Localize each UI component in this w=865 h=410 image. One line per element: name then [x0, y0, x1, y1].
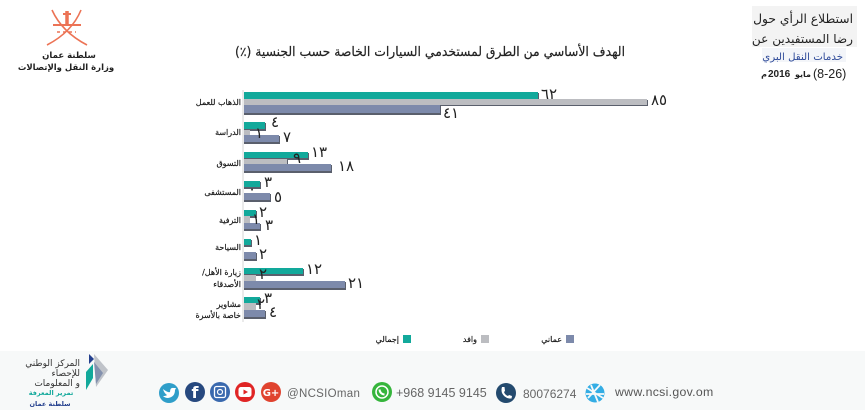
NCSI logo: و المعلومات: [34, 379, 80, 389]
icon: NCSI arrow mark: [86, 354, 108, 390]
group: shopping: ١٨: [338, 157, 354, 175]
group: study: ٤: [271, 113, 279, 131]
group: shopping: التسوق: [216, 159, 241, 168]
legend: [376, 335, 574, 345]
survey title block: خدمات النقل البري: [762, 52, 843, 63]
group: private family errands: ٢: [257, 295, 265, 313]
icon: phone: [496, 383, 516, 403]
group: recreation: ٣: [265, 216, 273, 234]
whatsapp number: +968 9145 9145: [396, 386, 487, 400]
group: study: ١: [255, 124, 263, 142]
survey title block: استطلاع الرأي حول: [753, 11, 853, 27]
icon: facebook: f: [192, 383, 200, 402]
legend: total: إجمالي: [376, 335, 399, 345]
group: shopping: ١٣: [311, 143, 327, 161]
group: visiting family and friends: زيارة الأهل/: [202, 267, 241, 277]
icon: twitter: [159, 383, 179, 403]
survey title block: (8-26): [813, 67, 846, 81]
group: hospital: ٣: [264, 173, 272, 191]
survey title block: مايو: [794, 70, 811, 79]
NCSI logo: المركز الوطني: [25, 359, 80, 369]
group: recreation: ٢: [259, 203, 267, 221]
group: hospital: [204, 173, 282, 206]
group: private family errands: مشاوير: [216, 300, 241, 309]
legend: Omani: [541, 335, 574, 344]
group: private family errands: [195, 289, 277, 321]
group: private family errands: خاصة بالأسرة: [195, 310, 241, 320]
NCSI logo: [25, 354, 108, 408]
legend: expatriate: [463, 335, 489, 344]
group: hospital: ٥: [274, 188, 282, 206]
chart title: الهدف الأساسي من الطرق لمستخدمي السيارات الخاصة حسب الجنسية (٪): [235, 43, 625, 60]
group: shopping: [216, 143, 354, 175]
footer band: [0, 351, 865, 410]
icon: youtube: [235, 382, 255, 402]
survey title block: رضا المستفيدين عن: [752, 32, 853, 47]
survey title block: م: [761, 70, 767, 79]
legend: Omani: عماني: [541, 335, 562, 344]
NCSI logo: للإحصاء: [52, 369, 80, 379]
group: tourism: السياحة: [215, 243, 241, 252]
group: recreation: ١: [252, 210, 260, 228]
icon: Oman emblem: [47, 10, 87, 45]
group: shopping: ٩: [293, 149, 301, 167]
icon: globe: [586, 384, 604, 402]
group: visiting family and friends: ٢: [259, 265, 267, 283]
group: study: الدراسة: [215, 128, 241, 137]
logo: Oman ministry of transport: [18, 10, 114, 73]
group: visiting family and friends: [202, 260, 364, 292]
group: tourism: ٢: [259, 245, 267, 263]
group: work: ٤١: [443, 104, 459, 122]
group: visiting family and friends: الأصدقاء: [213, 279, 241, 289]
survey title block: 2016: [768, 69, 791, 80]
group: visiting family and friends: ١٢: [306, 260, 322, 278]
icon: whatsapp: [372, 382, 392, 402]
website: www.ncsi.gov.om: [614, 385, 714, 399]
social icons: [159, 382, 281, 403]
NCSI logo: سلطنة عمان: [29, 400, 71, 408]
group: study: ٧: [283, 128, 291, 146]
group: work: [196, 85, 667, 122]
ministry name: سلطنة عمان: [42, 51, 96, 61]
group: recreation: [219, 203, 273, 234]
group: study: [215, 113, 291, 146]
icon: google plus: G+: [263, 388, 279, 399]
logo: Oman ministry of transport: وزارة النقل والإتصالات: [18, 63, 114, 73]
bar chart: [195, 85, 667, 322]
group: work: الذهاب للعمل: [196, 98, 241, 107]
group: hospital: ٠: [248, 180, 256, 198]
group: tourism: [215, 231, 267, 263]
NCSI logo: تمرير المعرفة: [29, 389, 73, 397]
group: hospital: المستشفى: [204, 188, 241, 197]
icon: instagram: [210, 382, 230, 402]
legend: total: [376, 335, 411, 345]
toll-free number: 80076274: [523, 387, 577, 401]
group: tourism: ١: [254, 231, 262, 249]
group: work: ٨٥: [651, 91, 667, 109]
group: visiting family and friends: ٢١: [348, 274, 364, 292]
group: private family errands: ٤: [269, 303, 277, 321]
group: private family errands: ٣: [264, 289, 272, 307]
legend: expatriate: وافد: [463, 335, 477, 344]
social handle: @NCSIOman: [287, 388, 360, 400]
survey title block: [752, 6, 857, 81]
group: work: ٦٢: [541, 85, 557, 103]
group: recreation: الترفية: [219, 216, 241, 225]
